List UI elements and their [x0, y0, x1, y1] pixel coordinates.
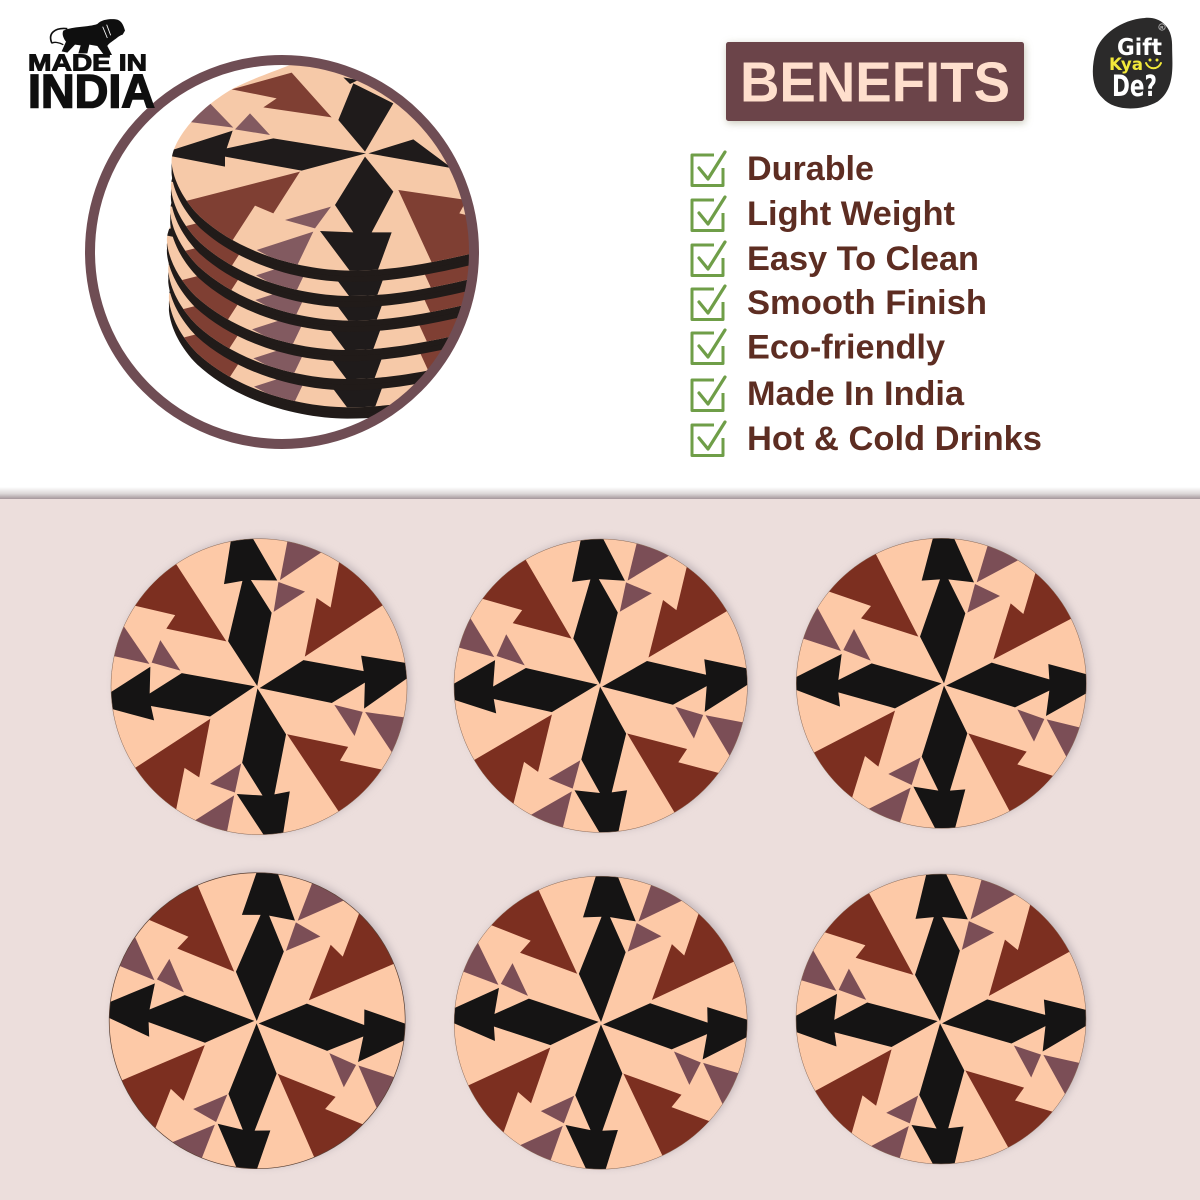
item: eco-friendly: Eco-friendly [747, 328, 945, 366]
logo: gift kya de [1093, 18, 1172, 108]
coaster: row 2 column 2 [454, 872, 754, 1170]
panel: top white header [0, 0, 1200, 499]
shadow band between panels [0, 487, 1200, 499]
item: easy to clean: Easy To Clean [747, 240, 979, 278]
item: light weight: Light Weight [747, 195, 955, 233]
logo: made in india [28, 19, 155, 118]
list: benefits checklist [692, 150, 1042, 458]
coaster: row 1 column 2 [454, 534, 754, 834]
logo: gift kya de: Gift [1117, 35, 1162, 61]
text: made in: MADE IN [28, 50, 147, 76]
item: hot and cold drinks: Hot & Cold Drinks [747, 420, 1042, 458]
panel: bottom pink coaster panel [0, 499, 1200, 1200]
logo: gift kya de: R [1160, 25, 1164, 30]
icon: lion [51, 19, 125, 55]
coaster: row 2 column 3 [796, 870, 1092, 1166]
item: smooth finish: Smooth Finish [747, 284, 987, 322]
logo: gift kya de: Kya [1109, 55, 1143, 75]
item: durable: Durable [747, 150, 874, 188]
coaster: row 2 column 1 [108, 868, 411, 1170]
coaster: row 1 column 3 [796, 534, 1092, 830]
coaster: row 1 column 1 [110, 534, 413, 836]
item: made in india: Made In India [747, 375, 965, 413]
heading: benefits: BENEFITS [740, 50, 1010, 114]
logo: gift kya de: De? [1112, 69, 1157, 103]
item: durable [692, 150, 874, 188]
text: india: INDIA [28, 64, 155, 118]
photo: stack of coasters in ring [90, 33, 500, 444]
